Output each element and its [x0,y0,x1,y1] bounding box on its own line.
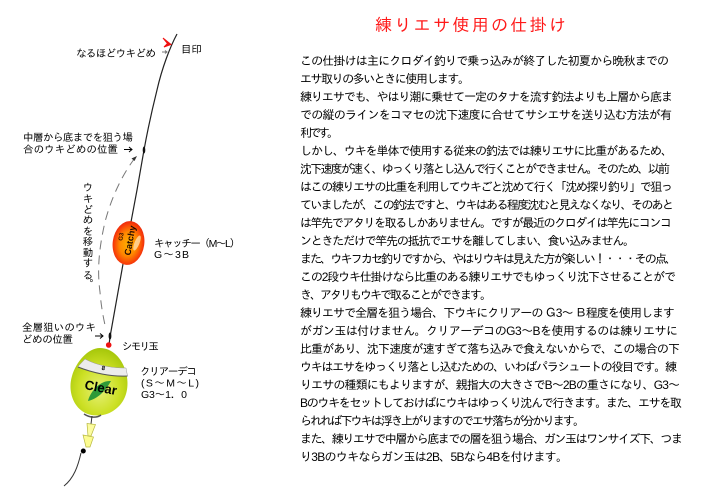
sliding stopper knot [143,146,145,154]
body text block: 練りエサでも、やはり潮に乗せて一定のタナを流す釣法よりも上層から底ま [300,90,673,104]
body text block: この2段ウキ仕掛けなら比重のある練りエサでもゆっくり沈下させることがで [300,270,676,284]
body text block: Bのウキをセットしておけばにウキはゆっくり沈んで行きます。また、エサを取 [300,396,682,410]
body text block: 練りエサで全層を狙う場合、下ウキにクリアーの Ｇ3～ Ｂ程度を使用します [300,306,675,320]
body text block: 沈下速度が速く、ゆっくり落とし込んで行くことができません。そのため、以前 [300,162,670,176]
float: Clear Deco green: Clear [83,377,118,398]
label: naruhodo stopper: なるほどウキどめ [76,48,156,60]
label: Clear Deco specification: (S～M～L) [141,378,199,390]
icon: red marker arrow [163,38,171,47]
body text block: はこの練りエサの比重を利用してウキごと沈めて行く「沈め探り釣り」で狙っ [300,180,673,194]
label: full-layer stopper position [22,322,103,346]
label: shimori bead: シモリ玉 [122,341,159,353]
arrow: dashed move path [99,156,137,325]
label: Catchy specification: G～3B [154,249,189,261]
body text block: 比重があり、沈下速度が速すぎて落ち込みで食えないからで、この場合の下 [300,342,680,356]
arrow: naruhodo stopper [162,50,167,54]
body text block: での縦のラインをコマセの沈下速度に合せてサシエサを送り込む方法が有 [300,108,672,122]
leader line [64,453,81,486]
label: mid-layer stopper position: 中層から底までを狙う場 [23,132,133,144]
body text block: エサ取りの多いときに使用します。 [300,72,470,86]
swivel and yellow connector [81,416,96,454]
body text block: られれば下ウキは浮き上がりますのでエサ落ちが分かります。 [300,414,585,428]
body text block: ウキはエサをゆっくり落とし込むための、いわばパラシュートの役目です。練 [300,360,677,374]
body text block: しかし、ウキを単体で使用する従来の釣法では練りエサに比重があるため、 [300,144,673,158]
body text block: き、アタリもウキで取ることができます。 [300,288,492,302]
float: Clear Deco green: 8 [101,366,106,372]
label: mid-layer stopper position: 合のウキどめの位置 [23,144,118,156]
label: full-layer stopper position: 全層狙いのウキ [22,322,96,334]
label: mark: 目印 [181,44,202,56]
label: full-layer stopper position: どめの位置 [22,334,73,346]
title: 練りエサ使用の仕掛け [375,16,566,35]
float: Catchy orange: G3 [118,232,126,241]
sinker bead [106,342,111,348]
label: Clear Deco specification [140,365,199,401]
label: Clear Deco specification: クリアーデコ [140,365,197,378]
body text block: また、練りエサで中層から底までの層を狙う場合、ガン玉はワンサイズ下、つま [300,432,683,446]
body text block: がガン玉は付けません。クリアーデコのG3～Bを使用するのは練りエサに [300,324,678,338]
label: move the stopper (vertical): ウキどめを移動する。 [82,182,94,290]
fishing line [109,34,177,345]
float: Catchy orange: Catchy [123,225,138,256]
body text block: は竿先でアタリを取るしかありません。ですが最近のクロダイは竿先にコンコ [300,216,672,230]
body text block: この仕掛けは主にクロダイ釣りで乗っ込みが終了した初夏から晩秋までの [300,54,669,68]
body text block: りエサの種類にもよりますが、親指大の大きさでB～2Bの重さになり、G3～ [300,378,680,392]
lower stopper knot [109,332,111,340]
body text block: り3Bのウキならガン玉は2B、5Bなら4Bを付けます。 [300,450,568,464]
body text block: また、ウキフカセ釣りですから、やはりウキは見えた方が楽しい！・・・その点、 [300,252,677,266]
body text block: 利です。 [300,126,339,140]
label: mid-layer stopper position [23,132,133,156]
label: Catchy specification [154,238,240,261]
label: Catchy specification: キャッチー（M～L） [154,238,240,250]
float: Catchy orange [110,219,147,267]
label: Clear Deco specification: G3～1．0 [141,389,187,401]
body text block: ンときただけで竿先の抵抗でエサを離してしまい、食い込みません。 [300,234,635,248]
body text block [300,54,683,464]
float: Clear Deco green [70,348,128,417]
body text block: ていましたが、この釣法ですと、ウキはある程度沈むと見えなくなり、そのあと [300,198,674,212]
